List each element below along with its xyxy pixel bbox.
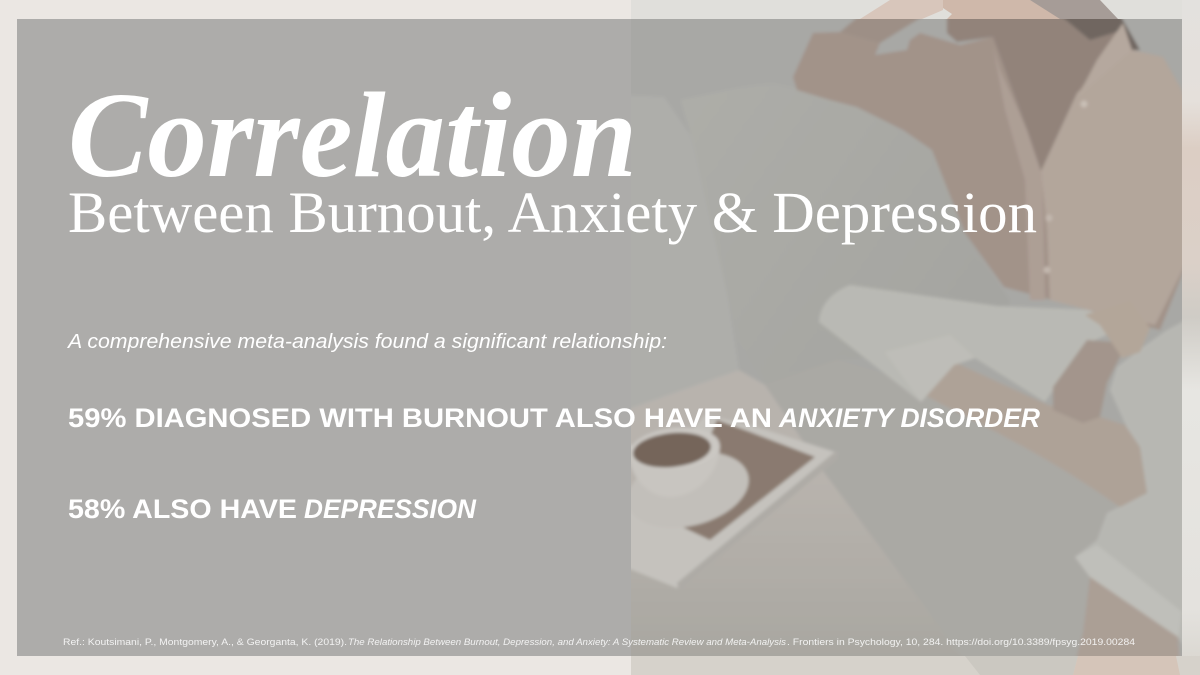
hair	[1064, 19, 1140, 52]
magazine cover picture	[674, 420, 815, 540]
statistic: depression: DEPRESSION	[304, 494, 476, 524]
lower right leg	[1077, 579, 1179, 656]
reference citation: . Frontiers in Psychology, 10, 284. https://doi.org/10.3389/fpsyg.2019.00284	[787, 637, 1135, 648]
large back cushion	[681, 84, 1010, 385]
photo margin: bottom strip below panel	[631, 656, 1200, 675]
photo seen through panel: woman sitting on a sofa	[619, 10, 1195, 675]
tea	[631, 429, 713, 471]
trouser cuff	[885, 335, 975, 402]
photo margin: right strip beside panel	[1182, 0, 1200, 675]
wall	[620, 10, 1190, 665]
statistic: anxiety	[68, 403, 1040, 433]
statistic: depression: 58% ALSO HAVE	[68, 494, 297, 524]
right collar	[1084, 22, 1132, 87]
forearm and hand	[1053, 340, 1127, 423]
left seat cushion	[631, 370, 889, 566]
cup	[631, 446, 722, 478]
crossed lower leg and foot	[925, 362, 1147, 507]
reference citation: Ref.: Koutsimani, P., Montgomery, A., & Georganta, K. (2019).	[63, 637, 347, 648]
intro sentence: A comprehensive meta-analysis found a significant relationship:	[67, 331, 667, 353]
white trousers	[819, 285, 1130, 402]
translucent grey panel, left half	[17, 19, 631, 656]
neck and chest	[947, 15, 1123, 171]
subtitle: Between Burnout, Anxiety & Depression	[68, 180, 1037, 245]
trouser cuff, lower	[1075, 545, 1182, 640]
saucer	[631, 452, 751, 529]
open magazine	[620, 415, 838, 588]
reference citation: The Relationship Between Burnout, Depression, and Anxiety: A Systematic Review and Meta-Analysis	[348, 637, 786, 648]
shirt cuff, lower sleeve	[1086, 312, 1148, 356]
lighter right shirt panel	[1041, 50, 1190, 325]
left back cushion	[620, 95, 739, 412]
statistic: anxiety: 59% DIAGNOSED WITH BURNOUT ALSO HAVE AN	[68, 403, 772, 433]
reference citation	[63, 637, 1135, 648]
shirt	[793, 23, 1190, 330]
shirt buttons	[1080, 100, 1088, 108]
left shirt placket	[999, 72, 1044, 300]
right pillow / trouser leg	[1088, 322, 1182, 643]
statistic: depression	[68, 494, 476, 524]
right seat cushion	[765, 360, 1130, 675]
statistic: anxiety: ANXIETY DISORDER	[778, 403, 1040, 433]
title: Correlation	[68, 68, 637, 203]
raised forearm	[841, 19, 920, 44]
photo margin: top strip above panel	[631, 0, 1200, 19]
